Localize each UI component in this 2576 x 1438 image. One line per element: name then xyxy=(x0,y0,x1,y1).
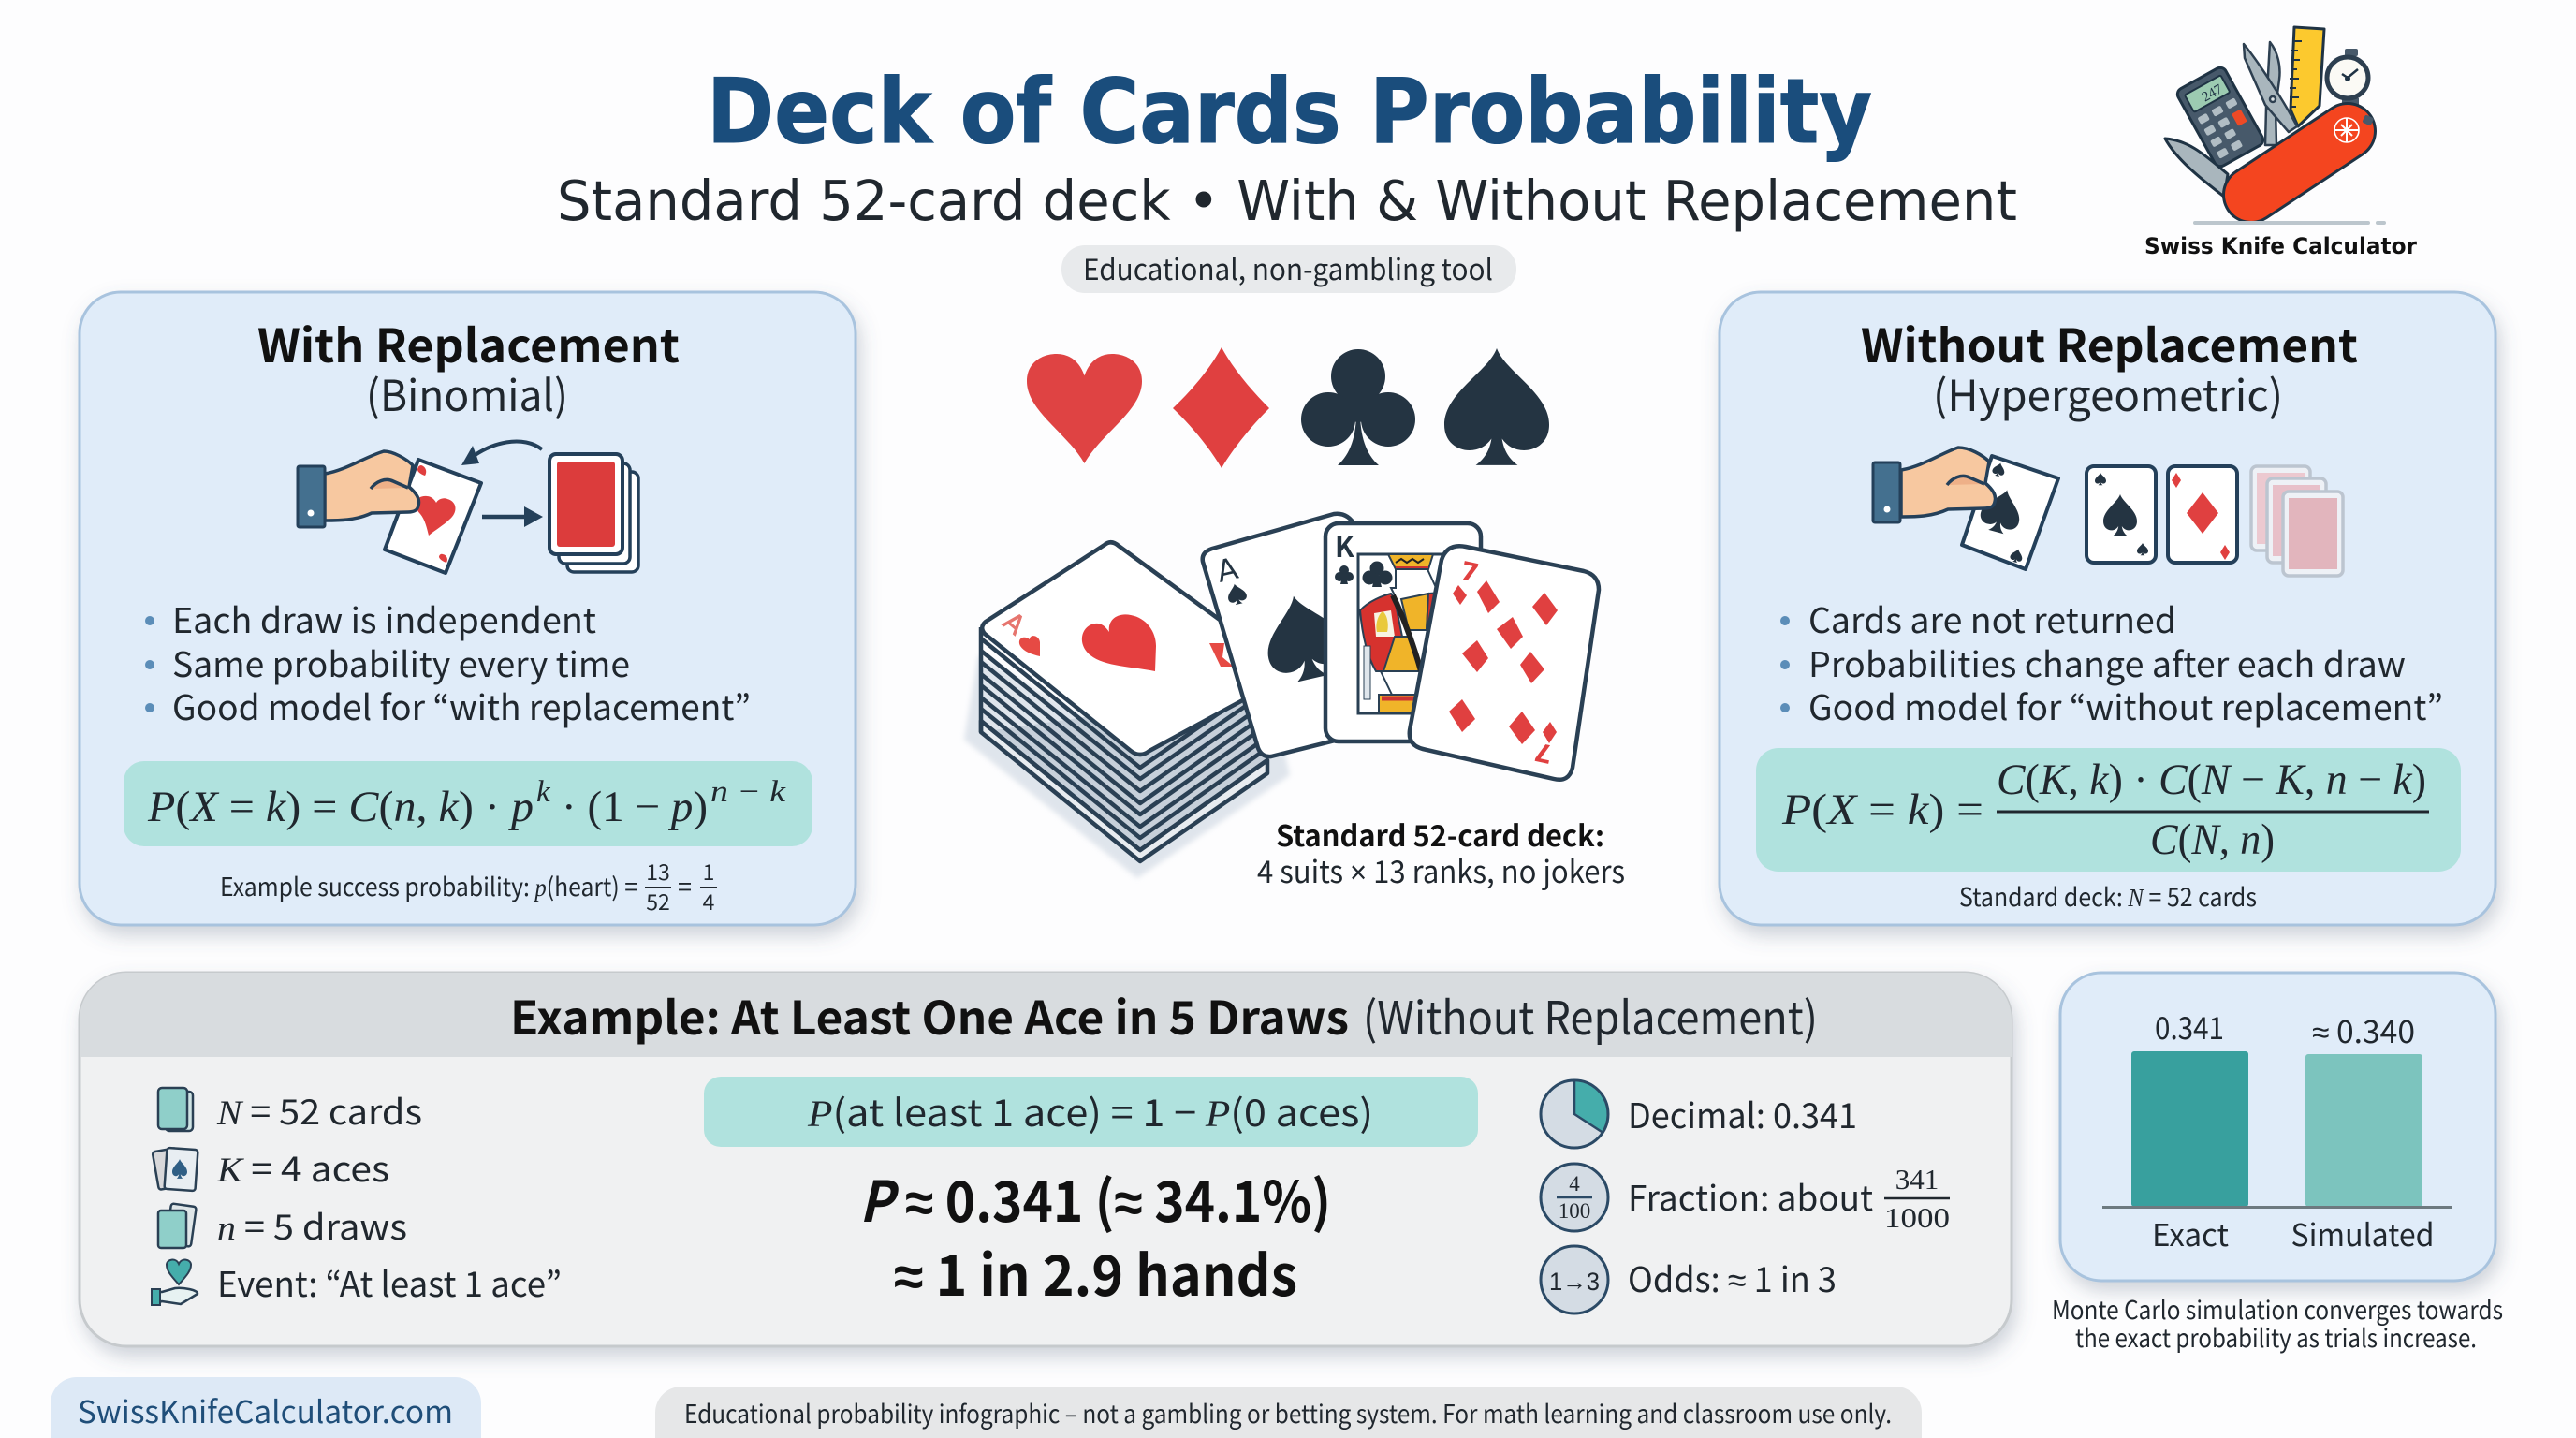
caption: monte carlo: Monte Carlo simulation converges towards xyxy=(2052,1290,2503,1327)
axis xyxy=(2102,1206,2452,1209)
note: example success probability xyxy=(220,855,717,917)
bullet list: Cards are not returned xyxy=(1808,593,2176,643)
label: odds: Odds: ≈ 1 in 3 xyxy=(1628,1252,1837,1302)
heading: example: (Without Replacement) xyxy=(1363,982,1818,1049)
king of clubs card xyxy=(1325,523,1481,741)
bullet list: Each draw is independent xyxy=(172,593,596,643)
bar: exact xyxy=(2131,1004,2248,1255)
formula: hypergeometric: P(X = k) = xyxy=(1781,785,1983,834)
bullet list: Good model for “without replacement” xyxy=(1808,680,2443,730)
ace of spades card: A xyxy=(1213,550,1241,590)
badge: educational tool: Educational, non-gambling tool xyxy=(1083,246,1493,288)
footer: disclaimer xyxy=(655,1387,1922,1438)
icon: draws n xyxy=(158,1203,197,1248)
ace of hearts on deck: A xyxy=(998,606,1031,641)
icon: blade xyxy=(2165,139,2228,197)
icon: pie chart xyxy=(1541,1080,1608,1148)
inputs list xyxy=(152,1084,562,1307)
ace of spades card xyxy=(1203,514,1413,756)
icon: event hand with heart xyxy=(152,1260,198,1305)
stacked deck xyxy=(981,542,1293,861)
ace of hearts on deck xyxy=(998,606,1234,671)
icon: fraction badge xyxy=(1541,1164,1608,1231)
panel: with replacement xyxy=(80,292,856,925)
subtitle: Standard 52-card deck • With & Without Replacement xyxy=(557,169,2017,233)
note: example success probability: Example success probability: p(heart) = xyxy=(220,867,637,903)
top card of deck xyxy=(982,542,1293,755)
formula: binomial xyxy=(124,761,812,846)
sub-heading: hypergeometric: (Hypergeometric) xyxy=(1933,362,2283,424)
icon: calculator: 247 xyxy=(2200,81,2226,105)
logo name: Swiss Knife Calculator xyxy=(2144,233,2417,259)
icon: calculator xyxy=(2175,66,2265,169)
caption: standard deck xyxy=(1257,813,1625,892)
bar: simulated: Simulated xyxy=(2291,1211,2434,1255)
caption: standard deck: 4 suits × 13 ranks, no jokers xyxy=(1257,847,1625,892)
seven of diamonds card: 7 xyxy=(1458,557,1481,589)
icon: red knife handle xyxy=(2251,114,2374,195)
label: fraction: 341 xyxy=(1895,1163,1939,1196)
caption: monte carlo xyxy=(2052,1290,2503,1355)
logo: Swiss Knife Calculator xyxy=(2144,27,2417,259)
title: Deck of Cards Probability xyxy=(707,61,1872,164)
formula: binomial: n − k xyxy=(710,775,787,809)
caption: monte carlo: the exact probability as trials increase. xyxy=(2075,1318,2477,1355)
label: K = 4 aces: K = 4 aces xyxy=(216,1141,389,1192)
icon: aces K xyxy=(153,1148,198,1191)
label: event: Event: “At least 1 ace” xyxy=(217,1256,562,1307)
king of clubs card: K xyxy=(1335,524,1354,565)
bullet list xyxy=(145,593,751,730)
bullet list: Same probability every time xyxy=(172,637,630,687)
note: standard deck N: Standard deck: N = 52 cards xyxy=(1959,877,2257,914)
icon: ruler xyxy=(2290,27,2324,126)
formula: hypergeometric: C(N, n) xyxy=(2150,815,2275,864)
icon: spade card xyxy=(2086,466,2156,563)
note: example success probability: = xyxy=(678,867,692,903)
result: one in hands: ≈ 1 in 2.9 hands xyxy=(894,1231,1297,1313)
icon: diamond card xyxy=(2168,466,2237,563)
label: n = 5 draws: n = 5 draws xyxy=(217,1199,407,1250)
formula: binomial: · (1 − p) xyxy=(562,783,708,831)
sub-heading: binomial: (Binomial) xyxy=(366,362,568,424)
representations list xyxy=(1541,1080,1950,1313)
formula: hypergeometric: C(K, k) · C(N − K, n − k) xyxy=(1997,756,2426,804)
deck shadow xyxy=(964,655,1290,878)
bullet list xyxy=(1780,593,2443,730)
bar: simulated xyxy=(2291,1007,2434,1255)
icon: fraction badge: 100 xyxy=(1559,1199,1590,1223)
bullet list: Probabilities change after each draw xyxy=(1808,637,2406,687)
icon: odds badge xyxy=(1541,1246,1608,1313)
formula: complement xyxy=(704,1077,1478,1147)
footer: website badge: SwissKnifeCalculator.com xyxy=(78,1387,453,1432)
icon: scissors xyxy=(2244,42,2297,145)
panel: without replacement xyxy=(1720,292,2496,925)
label: N = 52 cards: N = 52 cards xyxy=(216,1084,422,1135)
formula: binomial: k xyxy=(536,775,551,809)
heading: with replacement: With Replacement xyxy=(257,310,680,376)
heading: example xyxy=(510,982,1818,1049)
icon: odds badge: 1→3 xyxy=(1549,1268,1600,1296)
icon: club xyxy=(1301,349,1415,465)
icon: stopwatch xyxy=(2327,49,2368,108)
icon: diamond xyxy=(1173,347,1269,468)
footer: website badge xyxy=(51,1377,481,1438)
icon: fraction badge: 4 xyxy=(1569,1172,1580,1196)
note: example success probability: 52 xyxy=(646,885,670,917)
icon: card stack N xyxy=(158,1088,193,1131)
seven of diamonds card: 7 xyxy=(1532,736,1555,768)
panel: example at least one ace xyxy=(80,973,2012,1346)
footer: disclaimer: Educational probability infographic – not a gambling or betting system. For math learning and classroom use only. xyxy=(684,1394,1892,1431)
icon: spade xyxy=(1444,348,1549,465)
formula: complement: P(at least 1 ace) = 1 − P(0 aces) xyxy=(807,1083,1373,1137)
note: example success probability: 1 xyxy=(703,855,714,887)
heading: example: Example: At Least One Ace in 5 Draws xyxy=(510,982,1349,1049)
note: example success probability: 13 xyxy=(646,855,670,887)
illustration: card deck and fanned cards xyxy=(964,514,1599,878)
label: fraction: Fraction: about xyxy=(1628,1170,1873,1221)
icon: heart xyxy=(1027,354,1142,463)
bullet list: Good model for “with replacement” xyxy=(172,680,751,730)
icon: faded remaining deck xyxy=(2251,466,2343,576)
note: example success probability: 4 xyxy=(703,885,715,917)
bar: simulated: ≈ 0.340 xyxy=(2312,1007,2415,1052)
bar: exact: Exact xyxy=(2152,1211,2229,1255)
heading: without replacement: Without Replacement xyxy=(1861,310,2358,376)
formula: hypergeometric xyxy=(1756,748,2461,872)
label: decimal: Decimal: 0.341 xyxy=(1628,1088,1857,1138)
ground line xyxy=(2195,221,2384,225)
label: fraction: 1000 xyxy=(1884,1201,1950,1234)
suit icons xyxy=(1027,347,1549,468)
icon: hand drawing cards without return xyxy=(1873,448,2343,576)
label: fraction xyxy=(1628,1163,1950,1234)
icon: hand drawing a card and returning it xyxy=(298,442,638,573)
panel header band xyxy=(80,973,2012,1057)
seven of diamonds card xyxy=(1410,546,1599,780)
bar: exact: 0.341 xyxy=(2155,1004,2224,1049)
caption: standard deck: Standard 52-card deck: xyxy=(1276,813,1604,855)
panel: exact vs simulated bar chart xyxy=(2060,973,2496,1281)
result: probability value: P ≈ 0.341 (≈ 34.1%) xyxy=(859,1157,1331,1239)
formula: binomial: P(X = k) = C(n, k) · p xyxy=(147,783,534,831)
